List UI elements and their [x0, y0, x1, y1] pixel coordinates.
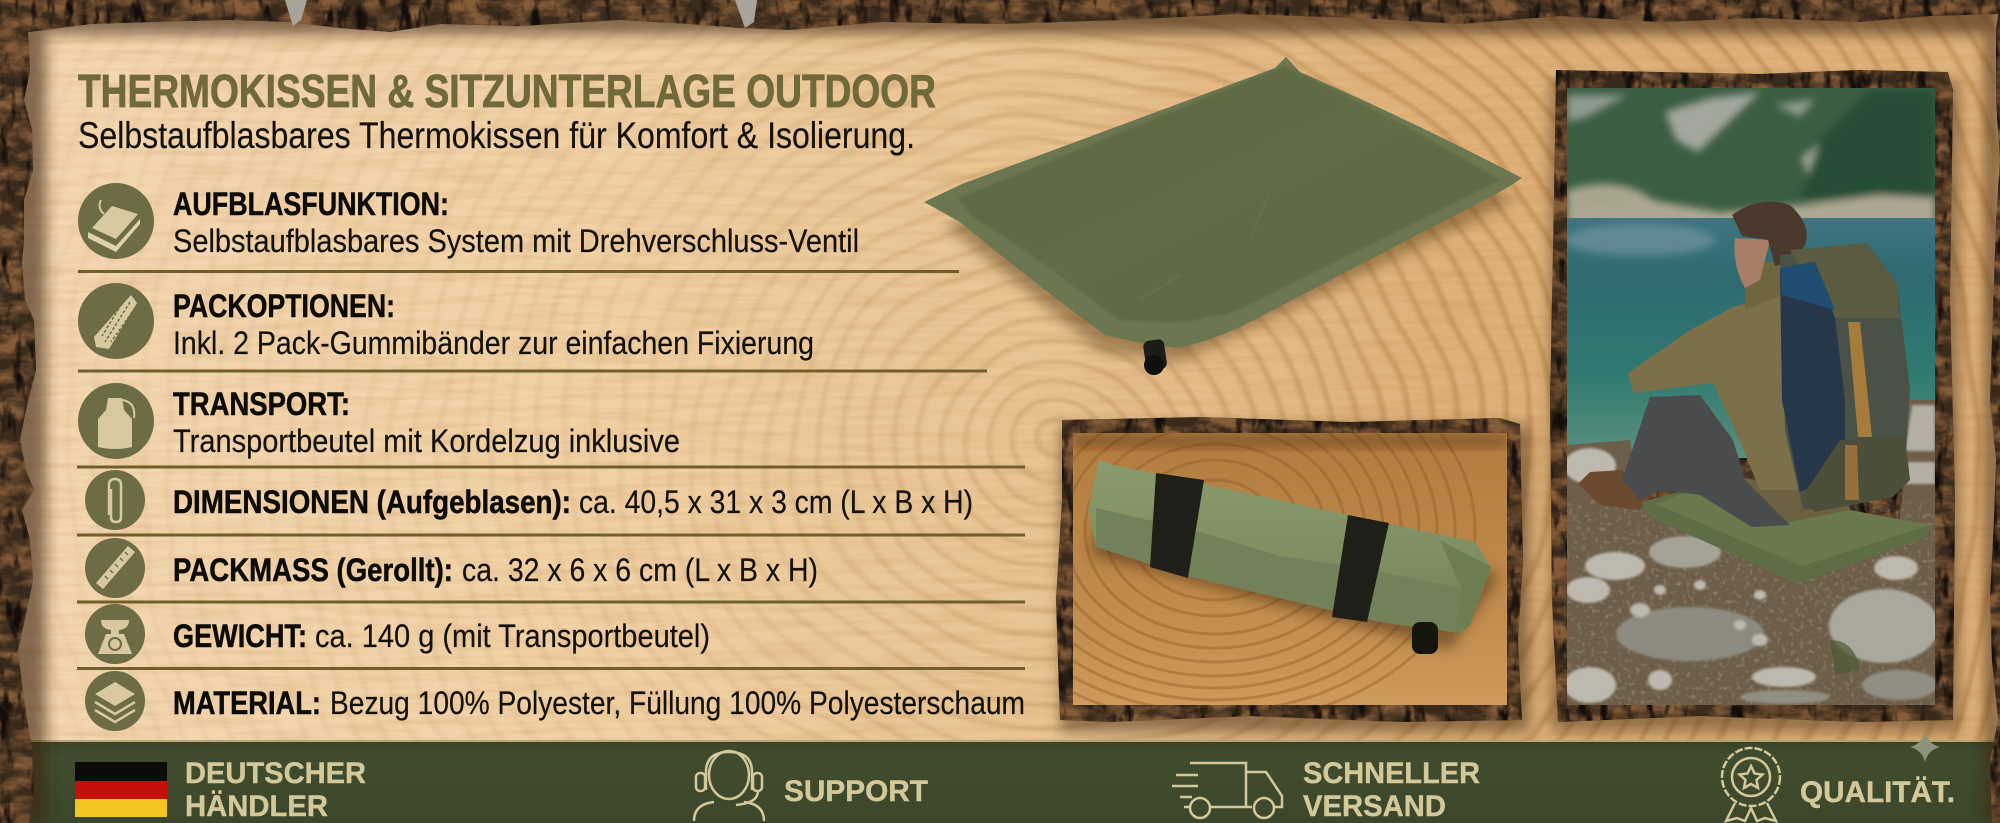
bark border: right: [1990, 0, 2000, 823]
heading: PACKMASS (Gerollt):: [173, 552, 453, 588]
icon: German flag: [75, 762, 167, 817]
heading: GEWICHT:: [173, 618, 307, 654]
value: Bezug 100% Polyester, Füllung 100% Polyesterschaum: [330, 685, 1025, 721]
title: THERMOKISSEN & SITZUNTERLAGE OUTDOOR: [78, 65, 936, 117]
lake: [1567, 218, 1935, 458]
row: Packmass: [85, 538, 818, 598]
icon: sparkle: [1910, 732, 1940, 762]
icon: ruler: [85, 538, 145, 598]
seat cushion: [1642, 484, 1932, 582]
icon bar background: [28, 740, 2000, 823]
icon: rosette: [1722, 748, 1780, 821]
heading: AUFBLASFUNKTION:: [173, 186, 449, 222]
heading: TRANSPORT:: [173, 386, 350, 422]
heading: MATERIAL:: [173, 685, 321, 721]
bark light patches: [285, 0, 757, 28]
description: Selbstaufblasbares System mit Drehverschluss-Ventil: [173, 223, 859, 259]
value: ca. 40,5 x 31 x 3 cm (L x B x H): [579, 484, 973, 520]
valve: [1412, 622, 1438, 654]
rocky ground: [1564, 400, 1939, 705]
product: seat cushion: [924, 57, 1522, 375]
hiker: [1578, 202, 1932, 582]
bark border: left: [0, 0, 36, 823]
heading: PACKOPTIONEN:: [173, 288, 395, 324]
label line 2: HÄNDLER: [185, 790, 328, 823]
row: Transport: [78, 383, 680, 459]
icon: headset person: [694, 751, 764, 821]
row: Aufblasfunktion: [78, 183, 859, 259]
rolled mat: [1088, 460, 1500, 654]
heading: DIMENSIONEN (Aufgeblasen):: [173, 484, 571, 520]
divider lines: [77, 270, 1025, 670]
badge: Schneller Versand: [1172, 757, 1480, 823]
icon: layers: [85, 671, 145, 731]
subtitle: Selbstaufblasbares Thermokissen für Komfort & Isolierung.: [78, 115, 915, 156]
icon: elastic band: [78, 283, 154, 359]
badge: Support: [694, 751, 928, 821]
value: ca. 140 g (mit Transportbeutel): [315, 618, 710, 654]
description: Inkl. 2 Pack-Gummibänder zur einfachen Fixierung: [173, 325, 814, 361]
badge: Qualität: [1722, 732, 1955, 821]
label: SUPPORT: [784, 775, 928, 808]
photo frame: rolled mat: [1050, 416, 1539, 740]
row: Gewicht: [85, 604, 710, 664]
bark border: top: [0, 0, 2000, 32]
label: SCHNELLER: [1303, 757, 1480, 790]
icon: delivery truck: [1172, 763, 1282, 818]
icon: paper clip: [85, 470, 145, 530]
row: Material: [85, 671, 1025, 731]
label line 2: VERSAND: [1303, 790, 1446, 823]
mountain: [1567, 88, 1935, 228]
value: ca. 32 x 6 x 6 cm (L x B x H): [462, 552, 818, 588]
icon: cushion: [78, 183, 154, 259]
photo frame: hiker at lake: [1550, 70, 1960, 732]
row: Dimensionen: [85, 470, 973, 530]
icon: drawstring bag: [78, 383, 154, 459]
valve: [1143, 339, 1168, 375]
row: Packoptionen: [78, 283, 814, 361]
label: QUALITÄT.: [1800, 776, 1955, 809]
label: DEUTSCHER: [185, 757, 366, 790]
description: Transportbeutel mit Kordelzug inklusive: [173, 423, 680, 459]
badge: Deutscher Händler: [75, 757, 366, 823]
icon: scale: [85, 604, 145, 664]
